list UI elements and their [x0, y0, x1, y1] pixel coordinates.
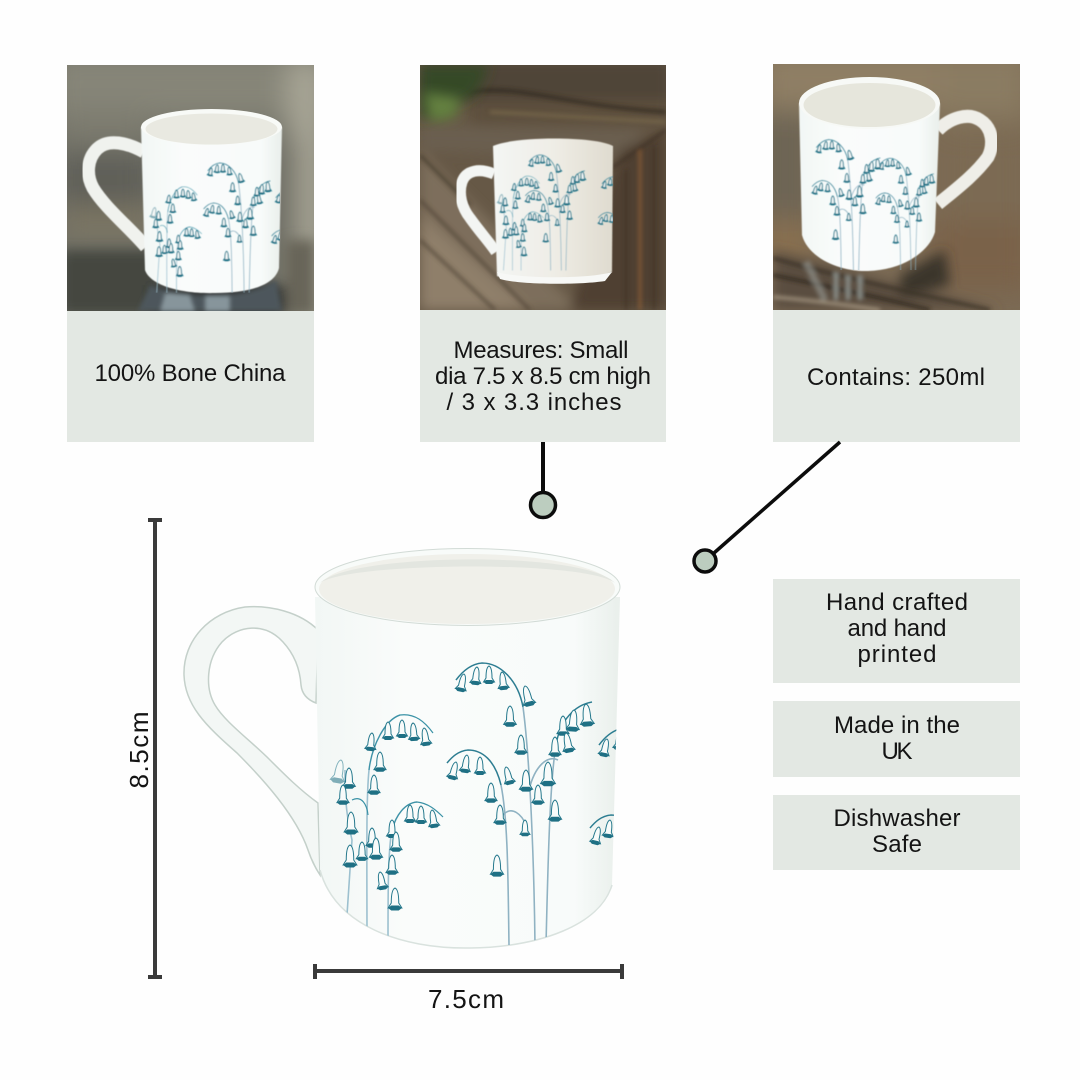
main mug handle — [184, 607, 320, 875]
feature: dishwasher safe: Safe — [872, 831, 922, 858]
panel: measures caption — [420, 310, 666, 442]
main mug interior — [319, 554, 615, 624]
height label: 8.5cm — [124, 712, 154, 788]
photo: mug on wooden block — [420, 60, 670, 310]
feature: made in the UK: Made in the — [834, 712, 960, 739]
photo: mug on brown table with handle right — [773, 64, 1020, 310]
panel: bone china caption — [67, 311, 314, 442]
feature: hand crafted — [773, 579, 1020, 683]
panel: measures caption: dia 7.5 x 8.5 cm high — [435, 363, 651, 390]
panel: measures caption: / 3 x 3.3 inches — [446, 389, 622, 416]
height dimension line — [148, 520, 162, 977]
mug handle — [460, 171, 496, 252]
connector: capacity to mug — [694, 442, 840, 572]
panel: bone china caption: 100% Bone China — [94, 360, 286, 387]
mug handle — [938, 116, 992, 204]
connector: measures to mug — [530, 442, 556, 518]
photo: mug on grey table with handle left — [67, 65, 314, 311]
feature: made in the UK: UK — [882, 738, 912, 765]
bluebell print — [330, 662, 616, 945]
feature: dishwasher safe: Dishwasher — [834, 805, 960, 832]
mug body — [799, 103, 940, 271]
panel: measures caption: Measures: Small — [454, 337, 628, 364]
main mug body — [315, 597, 620, 948]
feature: dishwasher safe — [773, 795, 1020, 870]
panel: capacity caption: Contains: 250ml — [807, 364, 985, 391]
mug body — [141, 127, 282, 293]
main mug rim — [315, 548, 620, 626]
feature: made in the UK — [773, 701, 1020, 777]
width dimension line — [315, 964, 622, 979]
width label: 7.5cm — [428, 984, 504, 1014]
feature: hand crafted: and hand — [848, 615, 946, 642]
feature: hand crafted: printed — [858, 641, 936, 668]
feature: hand crafted: Hand crafted — [826, 589, 968, 616]
mug body — [493, 138, 613, 282]
mug handle — [88, 143, 146, 247]
panel: capacity caption — [773, 310, 1020, 442]
main mug illustration — [183, 548, 620, 949]
